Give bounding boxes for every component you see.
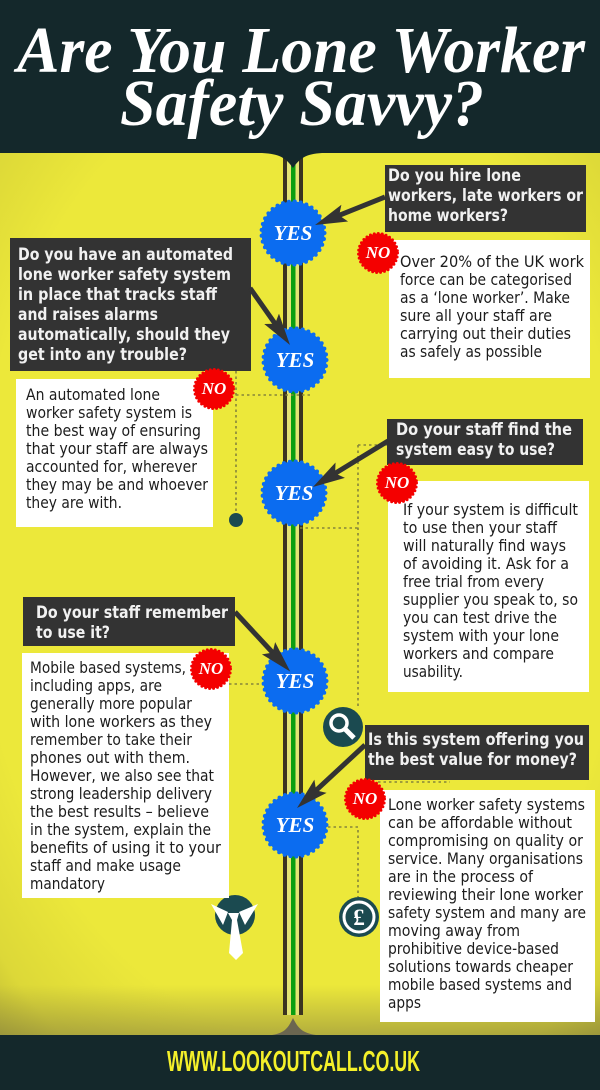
answer 3: system with your lone: [403, 626, 559, 645]
answer 5: [380, 790, 595, 1022]
answer 4: benefits of using it to your: [30, 838, 221, 857]
answer 5: moving away from: [388, 921, 520, 940]
answer 4: mandatory: [30, 874, 105, 893]
answer 2: the best way of ensuring: [26, 421, 201, 440]
NO badge 3: NO: [384, 473, 409, 492]
icon: pound coin: [339, 897, 379, 937]
answer 3: of avoiding it. Ask for a: [403, 554, 569, 573]
YES badge 5: YES: [276, 813, 314, 837]
answer 4: in the system, explain the: [30, 820, 211, 839]
answer 4: the best results – believe: [30, 802, 209, 821]
NO badge 2: [194, 370, 234, 408]
answer 2: they may be and whoever: [26, 475, 208, 494]
YES badge 2: [264, 328, 326, 392]
answer 5: are in the process of: [388, 867, 533, 886]
YES badge 1: YES: [274, 221, 312, 245]
question 2: and raises alarms: [18, 305, 158, 325]
arrow: question 2 to YES: [250, 288, 278, 329]
question 1: Do you hire lone: [388, 166, 521, 186]
icon: shirt collar and tie: [211, 895, 258, 960]
answer 1: sure all your staff are: [400, 306, 552, 325]
answer 2: [16, 379, 213, 527]
question 3: Do your staff find the: [396, 420, 572, 440]
bottom rail cap: [272, 1018, 316, 1035]
answer 5: prohibitive device-based: [388, 939, 559, 958]
YES badge 2: YES: [276, 348, 314, 372]
question 3: system easy to use?: [396, 440, 555, 460]
question 2: get into any trouble?: [18, 345, 187, 365]
answer 5: mobile based systems and: [388, 975, 572, 994]
question 4: Do your staff remember: [36, 603, 229, 623]
NO badge 4: NO: [198, 659, 223, 678]
NO badge 5: NO: [352, 789, 377, 808]
dotted connector lines: [229, 371, 450, 897]
answer 4: strong leadership delivery: [30, 784, 212, 803]
YES badge 4: YES: [276, 669, 314, 693]
question 1: home workers?: [388, 206, 508, 226]
NO badge 4: [192, 650, 230, 688]
answer 1: carrying out their duties: [400, 324, 571, 343]
question 1: [385, 165, 586, 232]
answer 3: free trial from every: [403, 572, 544, 591]
question 3: [387, 419, 583, 465]
answer 3: If your system is difficult: [403, 500, 578, 519]
answer 4: including apps, are: [30, 676, 162, 695]
question 2: lone worker safety system: [18, 265, 231, 285]
NO badge 1: NO: [365, 243, 390, 262]
question 2: Do you have an automated: [18, 245, 233, 265]
title: Safety Savvy?: [120, 67, 484, 140]
NO badge 2: NO: [201, 379, 226, 398]
answer 2: they are with.: [26, 493, 122, 512]
question 2: [10, 238, 251, 371]
YES badge 5: [264, 794, 326, 856]
YES badge 3: YES: [275, 481, 313, 505]
footer band: [0, 1035, 600, 1090]
answer 3: you can test drive the: [403, 608, 557, 627]
answer 3: workers and compare: [403, 644, 554, 663]
answer 1: as a ‘lone worker’. Make: [400, 288, 570, 307]
answer 4: remember to take their: [30, 730, 192, 749]
title: [13, 14, 586, 140]
answer 1: [389, 240, 590, 378]
question 4: to use it?: [36, 623, 110, 643]
NO badge 3: [378, 464, 416, 502]
answer 2: An automated lone: [26, 385, 160, 404]
answer 3: will naturally find ways: [403, 536, 566, 555]
answer 4: However, we also see that: [30, 766, 214, 785]
arrow: question 3 to YES: [330, 441, 388, 476]
answer 5: solutions towards cheaper: [388, 957, 573, 976]
NO badge 1: [358, 234, 398, 272]
arrow: question 1 to YES: [334, 197, 385, 218]
answer 2: accounted for, wherever: [26, 457, 197, 476]
answer 4: with lone workers as they: [30, 712, 212, 731]
answer 5: apps: [388, 993, 421, 1012]
answer 3: supplier you speak to, so: [403, 590, 578, 609]
answer 3: usability.: [403, 662, 463, 681]
answer 3: [388, 481, 589, 692]
arrow: question 4 to YES: [235, 612, 277, 657]
question 2: automatically, should they: [18, 325, 230, 345]
question 2: in place that tracks staff: [18, 285, 217, 305]
YES badge 3: [262, 462, 326, 524]
arrow: question 5 to YES: [312, 745, 365, 794]
answer 4: phones out with them.: [30, 748, 190, 767]
central timeline rail: [283, 153, 303, 1015]
icon: magnifying glass: [323, 707, 363, 747]
icon: pound coin: £: [353, 905, 365, 930]
answer 5: can be affordable without: [388, 813, 572, 832]
answer 4: staff and make usage: [30, 856, 181, 875]
answer 4: Mobile based systems,: [30, 658, 186, 677]
answer 1: Over 20% of the UK work: [400, 252, 585, 271]
NO badge 5: [346, 780, 384, 818]
YES badge 1: [262, 202, 324, 264]
answer 1: as safely as possible: [400, 342, 542, 361]
answer 4: [22, 653, 229, 898]
answer 1: force can be categorised: [400, 270, 572, 289]
YES badge 4: [264, 650, 326, 712]
question 4: [23, 597, 235, 646]
title: Are You Lone Worker: [13, 14, 586, 87]
question 5: [365, 725, 589, 780]
answer 3: to use then your staff: [403, 518, 558, 537]
header band: [0, 0, 600, 168]
answer 2: worker safety system is: [26, 403, 192, 422]
footer website link text: WWW.LOOKOUTCALL.CO.UK: [167, 1046, 420, 1078]
answer 2: that your staff are always: [26, 439, 208, 458]
icon: end dot: [229, 513, 243, 527]
answer 4: generally more popular: [30, 694, 192, 713]
